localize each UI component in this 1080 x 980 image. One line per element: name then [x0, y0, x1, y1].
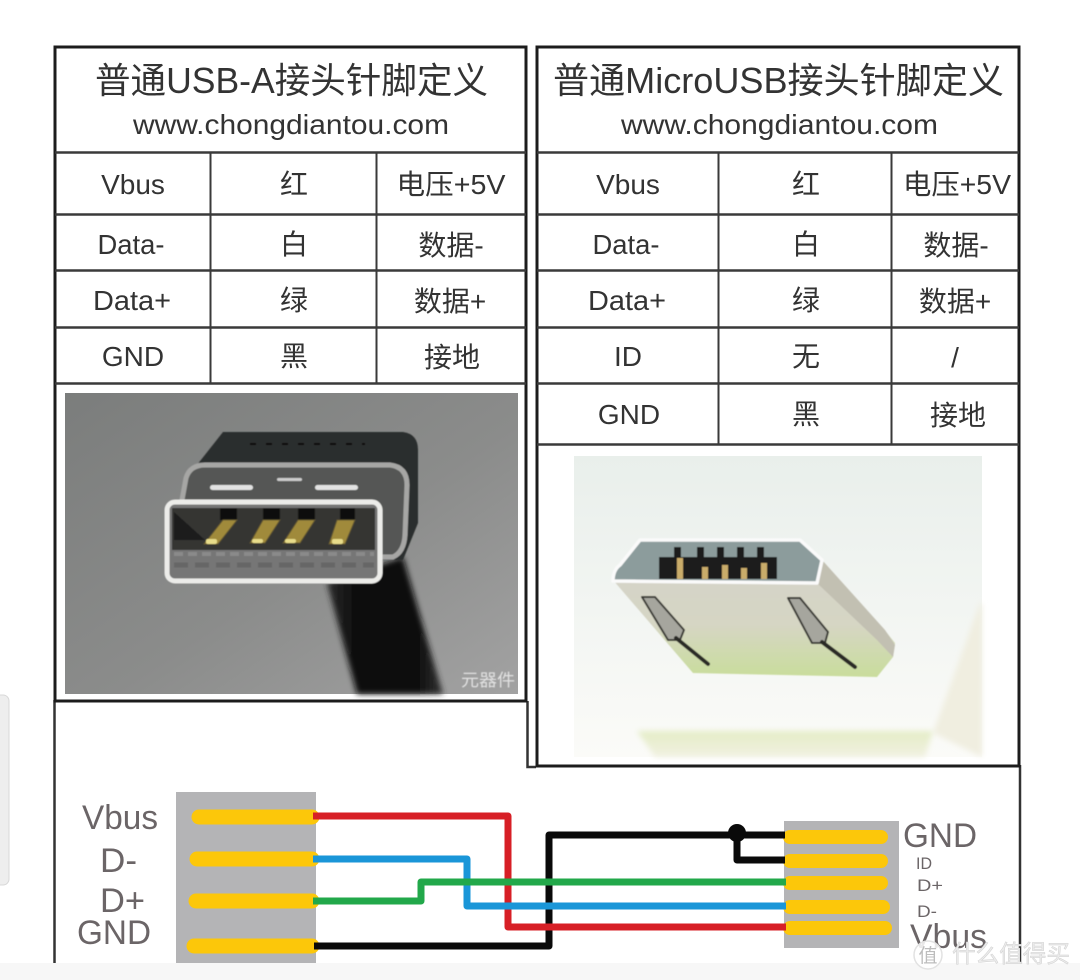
left pin labels: Vbus: [82, 799, 158, 837]
USB-A pin block: [176, 792, 316, 963]
panel: MicroUSB pin definition: [537, 47, 1019, 766]
MicroUSB website: www.chongdiantou.com: [620, 109, 938, 140]
USB-A title: 普通USB-A接头针脚定义: [95, 60, 488, 101]
MicroUSB row: Vbus: Vbus: [596, 169, 660, 200]
MicroUSB row: Data-: [592, 229, 989, 261]
MicroUSB row: ID: /: [951, 342, 959, 373]
right pin labels: D+: [917, 876, 943, 895]
wire: ground black: [314, 835, 785, 946]
left pin labels: D+: [100, 882, 145, 920]
right pin labels: D-: [917, 902, 937, 921]
MicroUSB row: Data+: [588, 285, 991, 317]
MicroUSB table grid: [537, 47, 1019, 766]
wire: Vbus red: [313, 816, 786, 927]
right pin labels: [903, 817, 987, 956]
bottom strip: [0, 963, 1080, 980]
USB-A row: Data-: 数据-: [418, 230, 484, 261]
watermark: 值: [918, 945, 938, 967]
MicroUSB pin block: [784, 821, 899, 948]
MicroUSB row: Data-: 数据-: [923, 230, 989, 261]
USB-A row: GND: [102, 341, 480, 373]
USB-A table grid: [55, 47, 526, 701]
right pin labels: GND: [903, 817, 977, 855]
MicroUSB row: Vbus: 电压+5V: [903, 169, 1011, 200]
USB-A website: www.chongdiantou.com: [132, 109, 449, 140]
USB-A row: Vbus: 电压+5V: [396, 169, 506, 200]
panel: USB-A pin definition: [55, 47, 526, 701]
USB-A row: GND: 接地: [424, 342, 480, 373]
USB-A row: Vbus: 红: [280, 169, 308, 200]
wire: D+ green: [313, 882, 786, 901]
right pin labels: ID: [916, 854, 932, 873]
USB-A row: Data+: 绿: [280, 285, 308, 316]
wire: ground junction: [728, 824, 746, 842]
USB-A row: GND: 黑: [280, 341, 308, 372]
wiring diagram: [77, 792, 987, 963]
USB-A row: Vbus: [101, 169, 506, 200]
MicroUSB row: Vbus: 红: [792, 169, 820, 200]
USB-A row: Data+: [93, 285, 486, 317]
USB-A row: Data-: Data-: [98, 229, 164, 260]
photo watermark: 元器件: [461, 671, 515, 690]
MicroUSB row: GND: GND: [598, 399, 660, 430]
USB-A row: Data-: 白: [280, 229, 308, 260]
left pin labels: [77, 799, 158, 952]
USB-A row: Data+: 数据+: [414, 286, 486, 317]
photo: MicroUSB connector: [574, 456, 982, 757]
MicroUSB title: 普通MicroUSB接头针脚定义: [553, 60, 1004, 101]
wire: D- blue: [313, 859, 786, 906]
MicroUSB row: GND: 黑: [792, 399, 820, 430]
watermark: 什么值得买: [952, 941, 1070, 968]
USB-A row: GND: GND: [102, 341, 164, 372]
MicroUSB row: Data-: Data-: [592, 229, 660, 260]
MicroUSB row: GND: 接地: [930, 400, 986, 431]
USB-A row: Data-: [98, 229, 484, 261]
USB-A row: Vbus: Vbus: [101, 169, 165, 200]
MicroUSB row: Data+: 绿: [792, 285, 820, 316]
MicroUSB row: ID: [614, 341, 959, 373]
MicroUSB row: ID: 无: [792, 341, 820, 372]
outer frame lines: [54, 700, 1020, 963]
USB-A row: Data+: Data+: [93, 285, 171, 316]
MicroUSB row: Data+: Data+: [588, 285, 666, 316]
left pin labels: D-: [100, 842, 137, 880]
photo: USB-A connector: [65, 393, 518, 694]
MicroUSB row: ID: ID: [614, 341, 642, 372]
right pin labels: Vbus: [910, 918, 987, 956]
side tab: [0, 695, 9, 885]
MicroUSB row: Vbus: [596, 169, 1011, 200]
left pin labels: GND: [77, 914, 151, 952]
MicroUSB row: Data+: 数据+: [919, 286, 991, 317]
MicroUSB row: GND: [598, 399, 986, 431]
MicroUSB row: Data-: 白: [792, 229, 820, 260]
